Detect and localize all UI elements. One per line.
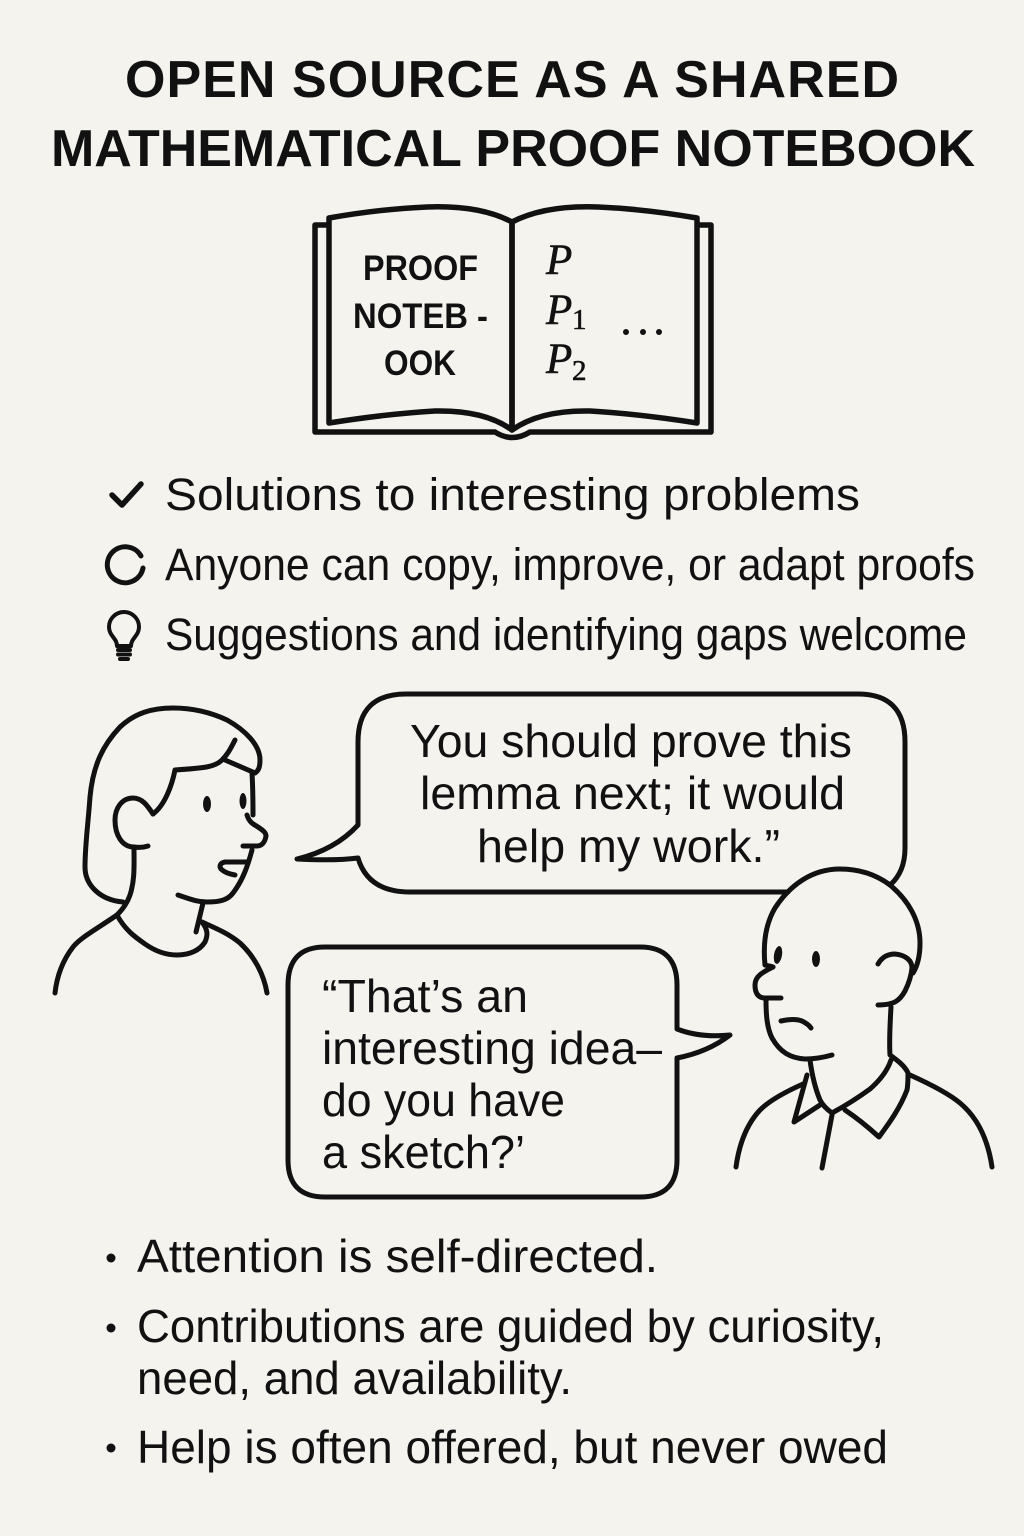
speech bubble: bottom: “That’s an xyxy=(322,970,528,1022)
eyes xyxy=(203,796,211,812)
icon: open circle xyxy=(107,547,143,583)
right page formulas: 2 xyxy=(572,355,586,387)
right page formulas: 1 xyxy=(572,304,586,336)
title: OPEN SOURCE AS A SHARED xyxy=(125,51,899,109)
bullet: contributions: Contributions are guided by curiosity, xyxy=(137,1300,884,1352)
left page label: OOK xyxy=(384,344,456,383)
speech bubble: bottom xyxy=(288,947,730,1197)
bullet: attention: Attention is self-directed. xyxy=(137,1230,658,1282)
left page label xyxy=(353,249,488,383)
closing bullet list xyxy=(106,1230,888,1473)
feature: suggestions: Suggestions and identifying gaps welcome xyxy=(165,609,967,660)
right page formulas: P xyxy=(545,336,572,383)
illustration: woman in profile xyxy=(55,708,267,993)
right page formulas: P xyxy=(545,287,572,334)
illustration: bald man in profile xyxy=(736,869,992,1168)
icon: open proof notebook xyxy=(315,207,711,438)
speech bubble: bottom: interesting idea– xyxy=(322,1022,662,1074)
feature: solutions: Solutions to interesting problems xyxy=(165,469,860,520)
eyes xyxy=(772,945,784,965)
speech bubble: top xyxy=(297,694,905,892)
bullet: help: Help is often offered, but never owed xyxy=(137,1421,888,1473)
icon: check mark xyxy=(112,484,141,505)
speech bubble: top: help my work.” xyxy=(477,820,780,872)
feature: copy and improve: Anyone can copy, improve, or adapt proofs xyxy=(165,539,975,590)
title xyxy=(51,51,975,178)
book covers and pages xyxy=(315,207,711,438)
feature list xyxy=(107,469,975,660)
speech bubble: bottom: a sketch?’ xyxy=(322,1126,525,1178)
title: MATHEMATICAL PROOF NOTEBOOK xyxy=(51,120,975,178)
right page formulas: P xyxy=(545,237,572,284)
bullet: contributions xyxy=(106,1300,884,1404)
speech bubble: bottom: do you have xyxy=(322,1074,565,1126)
left page label: PROOF xyxy=(363,249,478,288)
speech bubble: top: You should prove this xyxy=(410,715,852,767)
speech bubble: top: lemma next; it would xyxy=(420,767,845,819)
right page formulas xyxy=(545,237,662,387)
bullet: contributions: need, and availability. xyxy=(137,1352,572,1404)
icon: light bulb xyxy=(109,612,139,659)
left page label: NOTEB - xyxy=(353,297,488,336)
